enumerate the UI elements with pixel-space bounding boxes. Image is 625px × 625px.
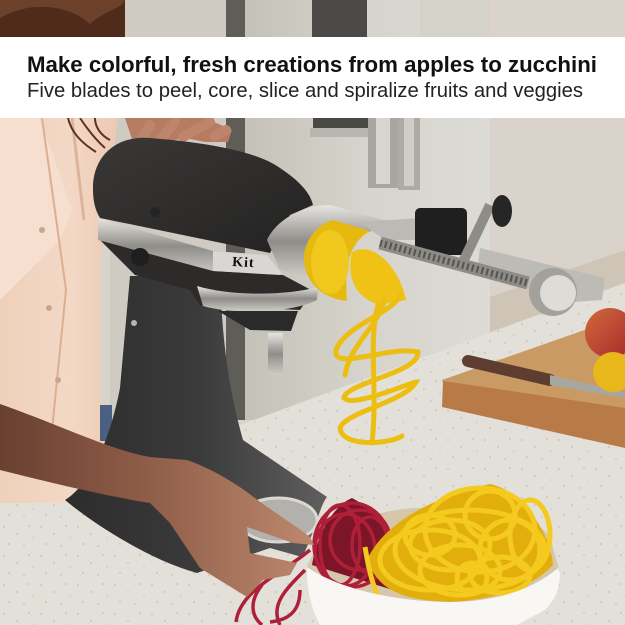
lower arm and hand	[0, 404, 314, 597]
yellow vegetable being spiralized	[304, 220, 418, 443]
mixer head	[93, 138, 318, 375]
cutting board with knife and fruit	[442, 308, 625, 448]
title: Make colorful, fresh creations from apples to zucchini	[27, 52, 597, 77]
metal lid on counter	[239, 498, 317, 542]
header band	[0, 37, 625, 118]
subtitle: Five blades to peel, core, slice and spiralize fruits and veggies	[27, 80, 583, 102]
mixer stand and base	[65, 240, 327, 573]
upper hand on mixer	[125, 118, 232, 152]
mixer head: Kit	[232, 255, 255, 271]
spiralizer attachment	[267, 195, 605, 316]
bowl of spiralized vegetables	[236, 484, 560, 625]
countertop	[0, 283, 625, 625]
person: shirt and hair	[0, 0, 125, 503]
